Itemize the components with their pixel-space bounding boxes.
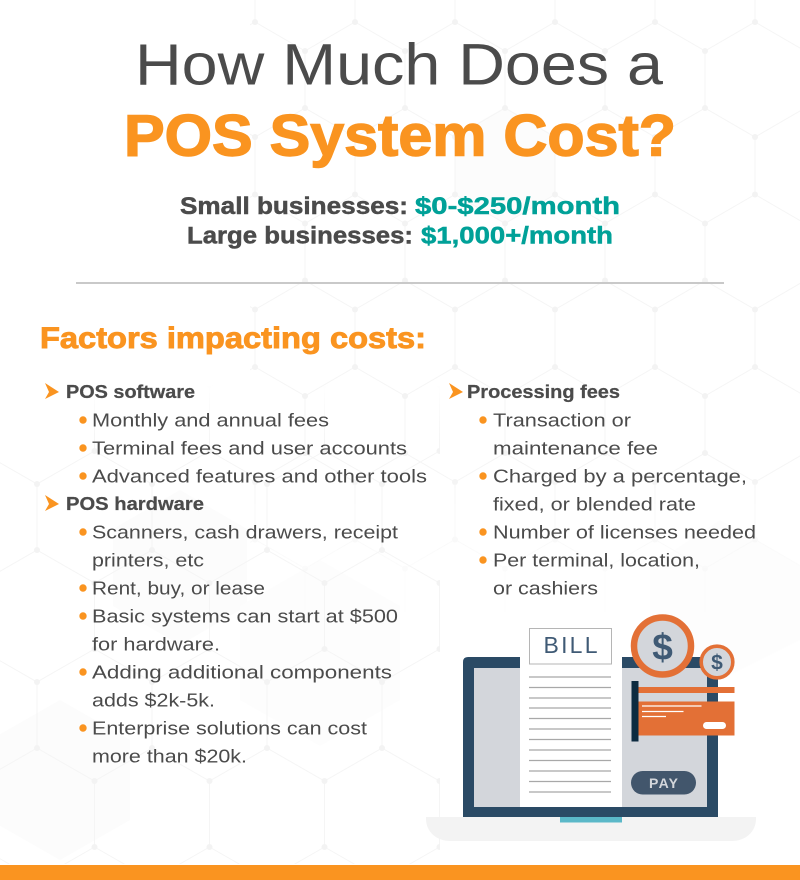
bill bbox=[520, 627, 622, 807]
processing fees items: maintenance fee bbox=[493, 438, 658, 458]
laptop base bbox=[426, 817, 756, 841]
icon: arrow processing fees bbox=[449, 383, 463, 399]
POS hardware items bbox=[79, 522, 399, 766]
POS hardware items: Rent, buy, or lease bbox=[92, 578, 265, 598]
processing fees items: fixed, or blended rate bbox=[493, 494, 696, 514]
POS hardware items: printers, etc bbox=[92, 550, 204, 570]
icon: large dollar coin bbox=[634, 618, 691, 674]
bill: BILL bbox=[544, 632, 598, 658]
laptop screen bbox=[463, 657, 718, 822]
POS software items: Monthly and annual fees bbox=[92, 410, 329, 430]
footer bar bbox=[0, 865, 800, 880]
icon: arrow POS hardware bbox=[45, 495, 59, 511]
heading: processing fees: Processing fees bbox=[467, 381, 620, 402]
icon: small dollar coin: $ bbox=[711, 652, 723, 674]
cost summary: Small businesses: bbox=[180, 193, 408, 220]
processing fees items: Charged by a percentage, bbox=[493, 466, 747, 486]
illustration: laptop with bill, card and coins bbox=[426, 618, 756, 841]
processing fees items: Number of licenses needed bbox=[493, 522, 756, 542]
POS software items bbox=[79, 410, 427, 486]
icon: large dollar coin: $ bbox=[652, 626, 673, 668]
heading: factors impacting costs: Factors impacting costs: bbox=[40, 322, 426, 355]
panel: left column list bbox=[45, 381, 427, 766]
title: How Much Does a bbox=[135, 32, 664, 98]
processing fees items: Transaction or bbox=[493, 410, 631, 430]
POS hardware items: Adding additional components bbox=[92, 662, 392, 682]
POS software items: Terminal fees and user accounts bbox=[92, 438, 407, 458]
POS hardware items: Basic systems can start at $500 bbox=[92, 606, 398, 626]
pay button: PAY bbox=[649, 775, 679, 791]
POS hardware items: Enterprise solutions can cost bbox=[92, 718, 368, 738]
processing fees items: or cashiers bbox=[493, 578, 598, 598]
cost summary: $1,000+/month bbox=[421, 222, 613, 250]
title: POS System Cost? bbox=[124, 104, 676, 168]
pay button bbox=[631, 771, 696, 794]
POS hardware items: adds $2k-5k. bbox=[92, 690, 215, 710]
title bbox=[124, 32, 676, 168]
heading: POS hardware: POS hardware bbox=[66, 493, 204, 514]
processing fees items bbox=[479, 410, 756, 598]
POS hardware items: Scanners, cash drawers, receipt bbox=[92, 522, 399, 542]
cost summary bbox=[180, 193, 620, 250]
cost summary: $0-$250/month bbox=[415, 193, 620, 220]
icon: arrow POS software bbox=[45, 383, 59, 399]
POS software items: Advanced features and other tools bbox=[92, 466, 427, 486]
POS hardware items: for hardware. bbox=[92, 634, 220, 654]
POS hardware items: more than $20k. bbox=[92, 746, 247, 766]
heading: POS software: POS software bbox=[66, 381, 195, 402]
panel: right column list bbox=[449, 381, 756, 598]
icon: small dollar coin bbox=[701, 646, 733, 678]
credit card bbox=[632, 681, 734, 742]
processing fees items: Per terminal, location, bbox=[493, 550, 700, 570]
cost summary: Large businesses: bbox=[187, 222, 413, 250]
